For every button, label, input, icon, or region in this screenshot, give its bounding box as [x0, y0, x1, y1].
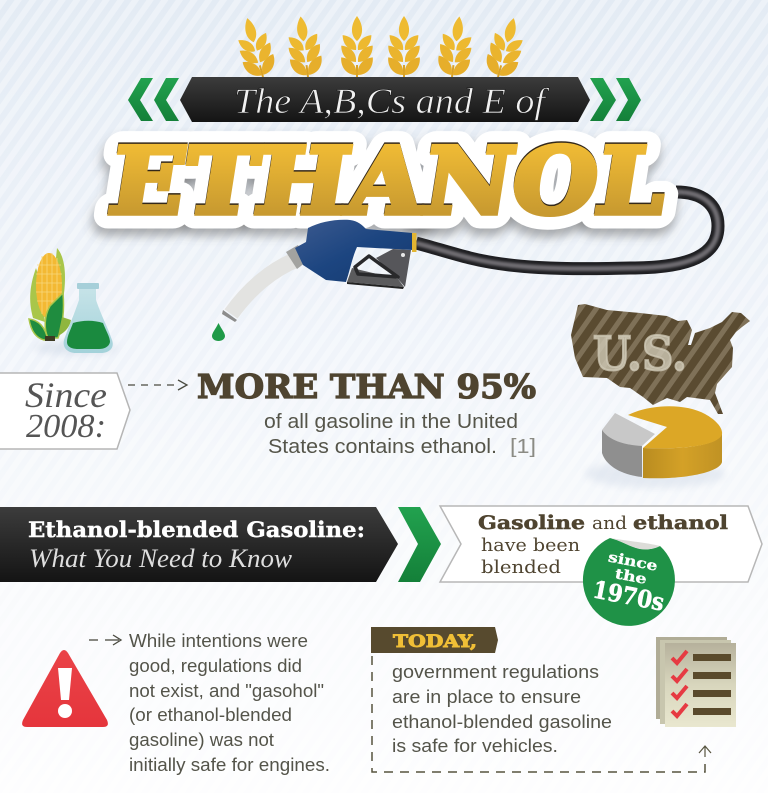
- title word ETHANOL: ETHANOL: [103, 128, 675, 235]
- title word ETHANOL: ETHANOL: [101, 135, 673, 242]
- blend ribbon: [440, 506, 762, 582]
- icon: wheat stalk 4: [384, 16, 424, 78]
- title word ETHANOL: ETHANOL: [103, 128, 675, 235]
- icon: green drop: [212, 323, 225, 341]
- collar: [412, 233, 416, 252]
- icon: wheat stalk 2: [281, 14, 328, 81]
- pie chart: [585, 406, 725, 488]
- right green chevrons: [590, 78, 641, 121]
- today text: [392, 661, 612, 756]
- sticker since the 1970s: 1970s: [591, 575, 667, 617]
- wheat row: [228, 13, 533, 83]
- icon: corn and flask: [29, 248, 118, 355]
- blend ribbon: ethanol: [633, 512, 728, 534]
- since label: 2008:: [26, 408, 106, 445]
- warning text: (or ethanol-blended: [129, 704, 292, 725]
- today tag: TODAY,: [393, 632, 477, 652]
- warning text: While intentions were: [129, 630, 308, 651]
- today tag: [371, 627, 498, 653]
- warning text: [129, 630, 330, 775]
- sticker since the 1970s: the: [614, 566, 648, 588]
- green chevron: [398, 507, 441, 582]
- statistic text: States contains ethanol.: [268, 436, 497, 458]
- warning text: gasoline) was not: [129, 729, 274, 750]
- fuel nozzle: [222, 220, 416, 322]
- blend ribbon: Gasoline: [478, 512, 585, 534]
- grey slice: [602, 413, 655, 477]
- title banner: The A,B,Cs and E of: [234, 81, 550, 121]
- today text: is safe for vehicles.: [392, 735, 558, 756]
- icon: checklist: [656, 637, 736, 727]
- icon: warning triangle: [22, 650, 108, 727]
- title banner: [180, 77, 590, 122]
- icon: wheat stalk 1: [228, 13, 282, 83]
- section ribbon: Ethanol-blended Gasoline:: [28, 517, 365, 542]
- nozzle body: [295, 220, 413, 282]
- warning text: initially safe for engines.: [129, 754, 330, 775]
- gold slice: [628, 406, 722, 478]
- map of U.S.: U.S.: [593, 327, 687, 382]
- arrow: warning to text: [89, 635, 121, 645]
- statistic headline: MORE THAN 95%: [197, 367, 536, 406]
- left green chevrons: [128, 78, 179, 121]
- sticker since the 1970s: [583, 538, 675, 626]
- blend ribbon: and: [592, 513, 627, 534]
- sticker since the 1970s: since: [607, 549, 659, 575]
- warning text: good, regulations did: [129, 655, 302, 676]
- hose: [416, 192, 718, 269]
- statistic text: [264, 411, 536, 458]
- spout: [231, 259, 298, 314]
- corn: [29, 248, 71, 341]
- warning text: not exist, and "gasohol": [129, 680, 324, 701]
- section ribbon: [0, 507, 398, 582]
- arrow: since to stat: [128, 380, 187, 390]
- today text: government regulations: [392, 661, 599, 682]
- flask: [64, 283, 113, 353]
- today text: ethanol-blended gasoline: [392, 711, 612, 732]
- statistic text: of all gasoline in the United: [264, 411, 518, 433]
- since label: Since: [25, 375, 107, 415]
- title word ETHANOL: ETHANOL: [102, 126, 674, 233]
- since label: [0, 373, 130, 449]
- map of U.S.: [571, 304, 750, 414]
- today text: are in place to ensure: [392, 686, 581, 707]
- section ribbon: What You Need to Know: [29, 544, 293, 573]
- icon: wheat stalk 5: [432, 14, 479, 81]
- trigger guard: [347, 249, 411, 289]
- icon: wheat stalk 6: [479, 13, 533, 83]
- blend ribbon: blended: [481, 557, 561, 578]
- icon: wheat stalk 3: [337, 16, 377, 78]
- statistic text: [1]: [510, 436, 536, 458]
- blend ribbon: have been: [481, 535, 580, 556]
- dashed connector arrow: [372, 656, 711, 772]
